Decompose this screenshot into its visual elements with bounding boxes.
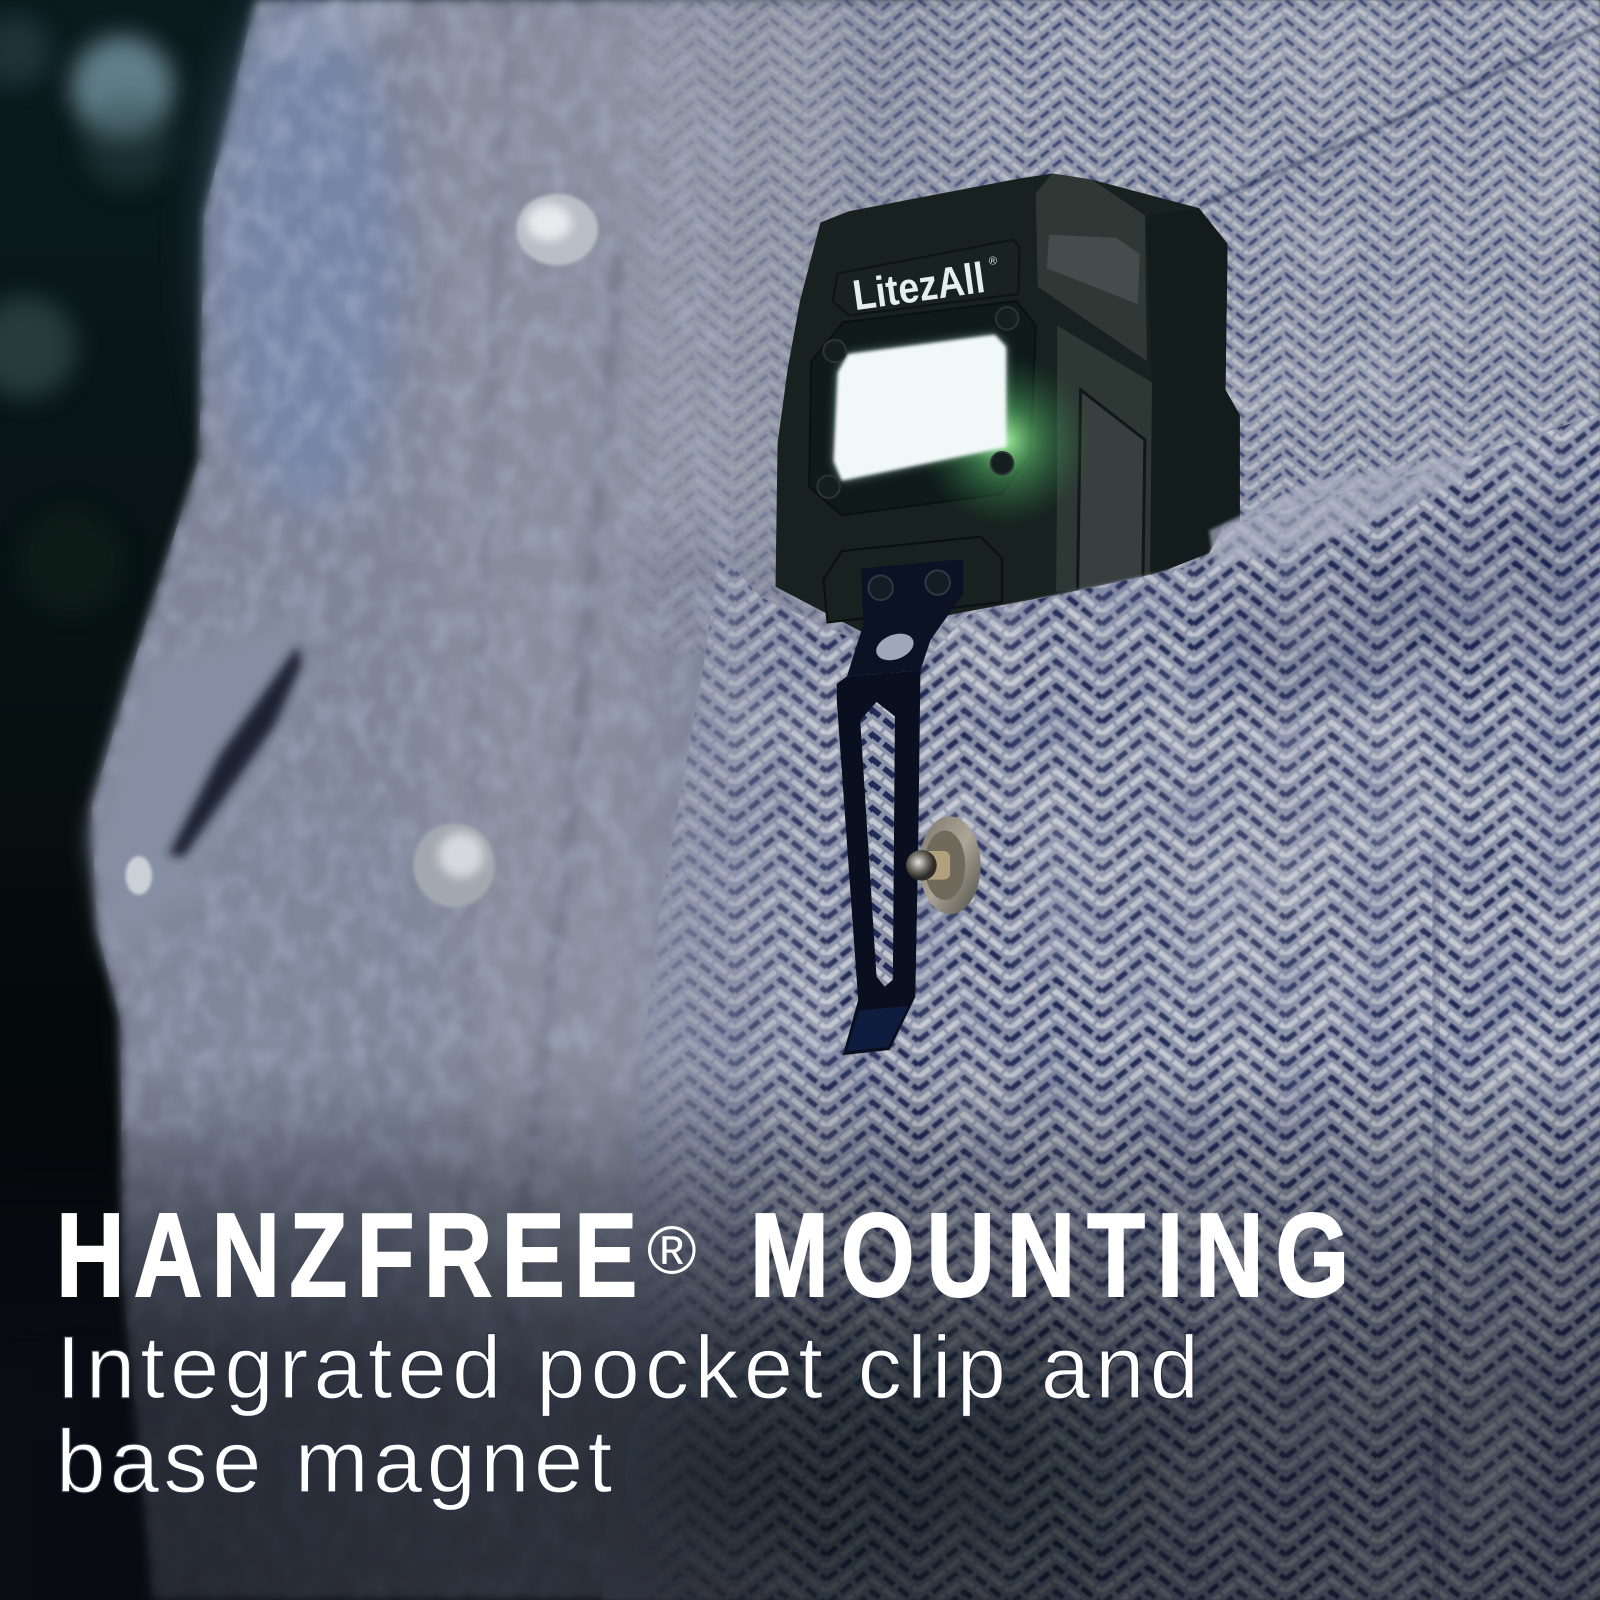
- device: lamp screws: [817, 307, 1018, 498]
- device: logo plate: [833, 240, 1019, 315]
- bottom dark gradient for text legibility: [0, 1078, 1600, 1600]
- device: glow: [918, 354, 1092, 528]
- device: lower recess: [1078, 390, 1145, 592]
- clip slot: [860, 702, 895, 987]
- pocket clip: [837, 559, 963, 1055]
- device: lower bracket: [823, 537, 1002, 622]
- device: registered mark: ®: [989, 255, 998, 267]
- device: dark right end face: [1147, 208, 1240, 577]
- device: white lamp: [834, 335, 1006, 481]
- shirt: herringbone upper right fabric: [571, 0, 1600, 653]
- clip plate hole: [872, 629, 917, 665]
- shirt: right side seams and shading: [1051, 26, 1600, 1600]
- subheading: integrated pocket clip and base magnet: base magnet: [56, 1412, 613, 1511]
- clip top plate: [847, 559, 963, 677]
- device: LitezAll flashlight: [776, 173, 1240, 633]
- device: side panel: [1056, 326, 1152, 592]
- clip arm: [837, 670, 920, 1055]
- device: upper recess: [1047, 235, 1140, 304]
- heading: HANZFREE® MOUNTING: ®: [647, 1213, 697, 1288]
- device: LitezAll logo: LitezAll: [850, 254, 988, 320]
- heading: HANZFREE® MOUNTING: MOUNTING: [750, 1189, 1349, 1321]
- subheading: integrated pocket clip and base magnet: [56, 1318, 1199, 1511]
- device body: [776, 173, 1240, 633]
- device: white lamp halo: [834, 335, 1006, 481]
- clip plate screws: [868, 570, 950, 600]
- subheading: integrated pocket clip and base magnet: Integrated pocket clip and: [56, 1318, 1199, 1417]
- heading: HANZFREE® MOUNTING: [56, 1189, 1349, 1321]
- shirt: snap buttons on placket: [413, 194, 598, 907]
- clip tip highlight: [847, 1006, 908, 1051]
- shirt: left chest pocket flap: [92, 612, 306, 964]
- pocket: herringbone fabric with flap: [571, 408, 1600, 1600]
- snap stud on pocket: [906, 816, 981, 914]
- heading: HANZFREE® MOUNTING: HANZFREE: [56, 1189, 637, 1321]
- device: lamp frame: [809, 301, 1036, 515]
- device: top right wedge face: [1036, 173, 1147, 361]
